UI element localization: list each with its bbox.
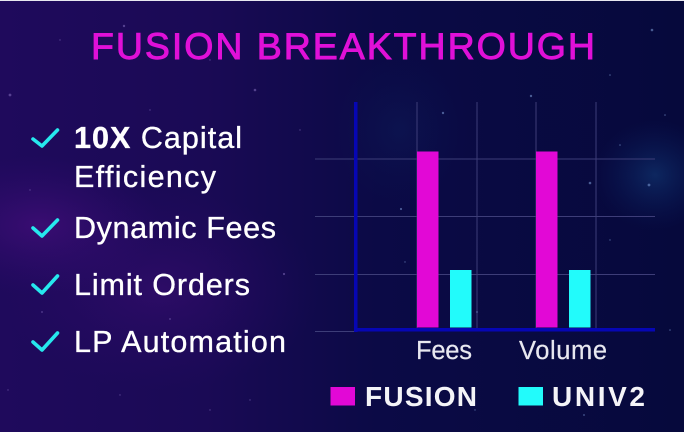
bar chart xyxy=(315,102,655,365)
axis label: Volume: Volume xyxy=(519,337,607,365)
bar: Fees UNIV2 xyxy=(450,270,472,328)
legend swatch: FUSION xyxy=(330,387,355,406)
bar: Volume FUSION xyxy=(536,152,558,328)
item: 10X Capital Efficiency: 10X Capital xyxy=(74,121,242,155)
legend xyxy=(330,381,645,412)
y axis xyxy=(354,102,358,332)
icon: check xyxy=(33,333,58,350)
checklist xyxy=(33,121,286,359)
item: 10X Capital Efficiency: Efficiency xyxy=(74,160,217,194)
icon: check xyxy=(33,276,58,293)
bar: Fees FUSION xyxy=(417,152,438,328)
axis label: Fees: Fees xyxy=(416,337,472,365)
icon: check xyxy=(33,220,58,236)
item: Dynamic Fees: Dynamic Fees xyxy=(74,211,276,245)
item: 10X Capital Efficiency xyxy=(33,121,242,194)
item: LP Automation: LP Automation xyxy=(74,325,286,359)
item: Limit Orders: Limit Orders xyxy=(74,268,250,302)
bar: Volume UNIV2 xyxy=(569,270,590,328)
legend label: UNIV2: UNIV2 xyxy=(552,381,645,412)
icon: check xyxy=(33,130,58,146)
title: FUSION BREAKTHROUGH xyxy=(91,25,595,67)
legend label: FUSION: FUSION xyxy=(365,381,477,412)
x axis xyxy=(354,328,655,332)
legend swatch: UNIV2 xyxy=(518,387,543,406)
